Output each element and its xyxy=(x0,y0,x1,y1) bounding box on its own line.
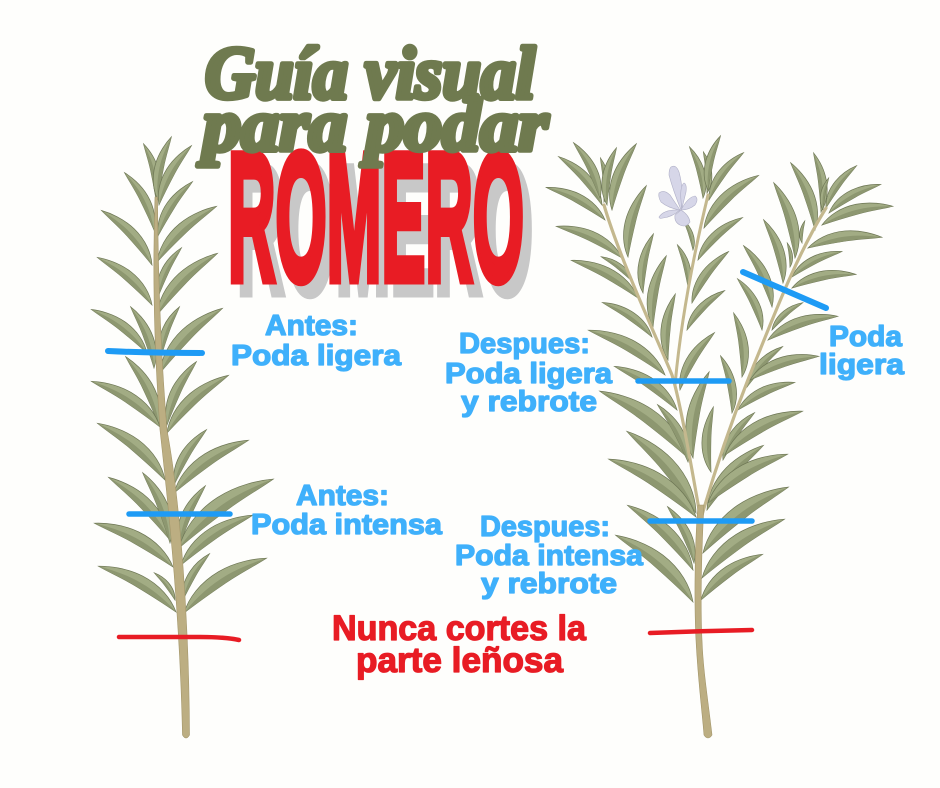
cut line: left light prune xyxy=(108,350,205,356)
label: Antes poda intensa: Antes: xyxy=(296,480,389,512)
label: Antes poda intensa xyxy=(251,480,443,541)
label: Poda ligera on right branch: Poda xyxy=(829,321,903,353)
left sprig leaves xyxy=(91,135,274,613)
label: Poda ligera on right branch xyxy=(819,321,905,381)
warning: never cut the woody part: parte leñosa xyxy=(356,641,564,680)
cut line: right woody limit xyxy=(650,630,752,633)
right sprig stems xyxy=(604,195,826,738)
label: Despues poda ligera y rebrote: Poda ligera xyxy=(445,358,613,390)
label: Despues poda ligera y rebrote: Despues: xyxy=(459,328,590,360)
label: Antes poda ligera: Antes: xyxy=(265,310,358,342)
label: Despues poda intensa y rebrote: Despues: xyxy=(480,511,610,543)
label: Despues poda intensa y rebrote: y rebrote xyxy=(481,568,617,600)
label: Antes poda intensa: Poda intensa xyxy=(251,509,443,541)
cut line: left hard prune xyxy=(129,511,230,517)
plant: right rosemary sprig with three branches xyxy=(546,134,893,738)
cut line: right light prune regrowth xyxy=(638,378,729,384)
label: Despues poda ligera y rebrote: y rebrote xyxy=(461,386,597,418)
cut line: right branch light prune xyxy=(743,272,826,308)
label: Poda ligera on right branch: ligera xyxy=(819,349,905,381)
icon: lilac rosemary flower xyxy=(659,166,697,226)
plant: left rosemary sprig xyxy=(91,135,274,738)
title: script line two: para podar xyxy=(197,85,549,167)
right sprig leaves xyxy=(546,134,893,602)
label: Despues poda ligera y rebrote xyxy=(445,328,613,418)
cut line: right hard prune regrowth xyxy=(650,518,752,524)
left sprig stem xyxy=(154,197,190,738)
label: Despues poda intensa y rebrote: Poda intensa xyxy=(455,540,644,572)
warning: never cut the woody part xyxy=(332,609,587,680)
label: Antes poda ligera: Poda ligera xyxy=(231,340,402,372)
warning: never cut the woody part: Nunca cortes la xyxy=(332,609,587,648)
title: script line one: Guía visual xyxy=(205,33,535,115)
cut line: left woody limit xyxy=(119,637,239,640)
label: Despues poda intensa y rebrote xyxy=(455,511,644,600)
label: Antes poda ligera xyxy=(231,310,402,372)
